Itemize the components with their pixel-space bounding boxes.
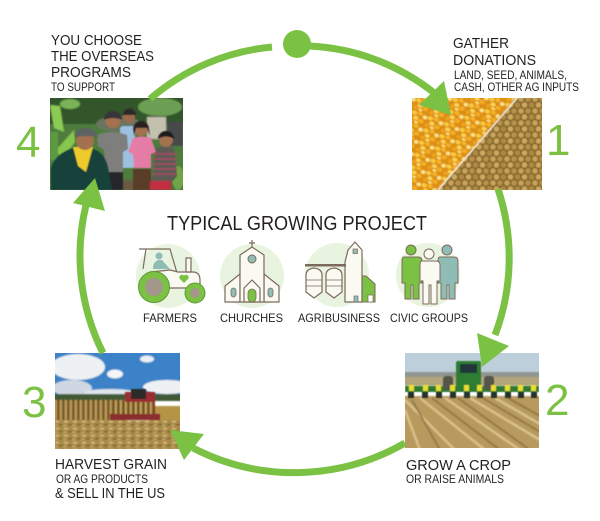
label: civic groups: CIVIC GROUPS [390, 311, 468, 325]
photo: overseas program family [48, 96, 185, 192]
text: harvest grain: & SELL IN THE US [55, 485, 165, 502]
icon: civic groups people [396, 243, 460, 307]
icon: agribusiness grain elevator [305, 242, 375, 307]
arrow: to step 4 [73, 178, 105, 211]
icon: church [220, 240, 284, 308]
text: harvest grain: HARVEST GRAIN [55, 456, 167, 473]
label: farmers: FARMERS [143, 311, 197, 325]
photo: planting tractor [403, 351, 541, 450]
person: man in green cardigan [51, 128, 112, 190]
photo: harvest combine [55, 353, 180, 449]
photo: corn and soybeans [410, 96, 544, 192]
heading: typical growing project: TYPICAL GROWING PROJECT [167, 213, 427, 235]
step number 1: 1 [546, 116, 570, 165]
text: grow a crop [406, 457, 511, 486]
text: harvest grain: OR AG PRODUCTS [56, 472, 148, 486]
text: gather donations: CASH, OTHER AG INPUTS [454, 80, 579, 94]
text: gather donations: DONATIONS [453, 52, 536, 69]
arrow: to step 2 [477, 333, 509, 367]
label: churches: CHURCHES [220, 311, 283, 325]
text: you choose the overseas programs: PROGRAMS [51, 64, 131, 81]
text: you choose the overseas programs [51, 32, 154, 94]
text: you choose the overseas programs: YOU CHOOSE [51, 32, 142, 49]
cycle start dot [283, 30, 311, 58]
text: grow a crop: OR RAISE ANIMALS [406, 472, 504, 486]
text: gather donations [453, 35, 579, 94]
text: harvest grain [55, 456, 167, 502]
icon: farmers tractor [136, 244, 205, 308]
arrow: to step 3 [170, 430, 204, 460]
person: boy in blue shirt [120, 109, 136, 168]
text: you choose the overseas programs: TO SUPPORT [51, 80, 116, 94]
text: you choose the overseas programs: THE OVERSEAS [51, 48, 154, 65]
cycle ring arcs [80, 46, 509, 473]
person: boy in grey shirt [97, 111, 128, 190]
arrow: to step 1 [419, 81, 451, 115]
step number 2: 2 [545, 376, 569, 425]
step number 4: 4 [16, 118, 40, 167]
person: girl in pink [128, 121, 156, 190]
label: agribusiness: AGRIBUSINESS [298, 311, 380, 325]
text: grow a crop: GROW A CROP [406, 457, 511, 474]
text: gather donations: LAND, SEED, ANIMALS, [454, 68, 567, 82]
person: woman in striped top [150, 131, 177, 190]
text: gather donations: GATHER [453, 35, 509, 52]
step number 3: 3 [22, 378, 46, 427]
